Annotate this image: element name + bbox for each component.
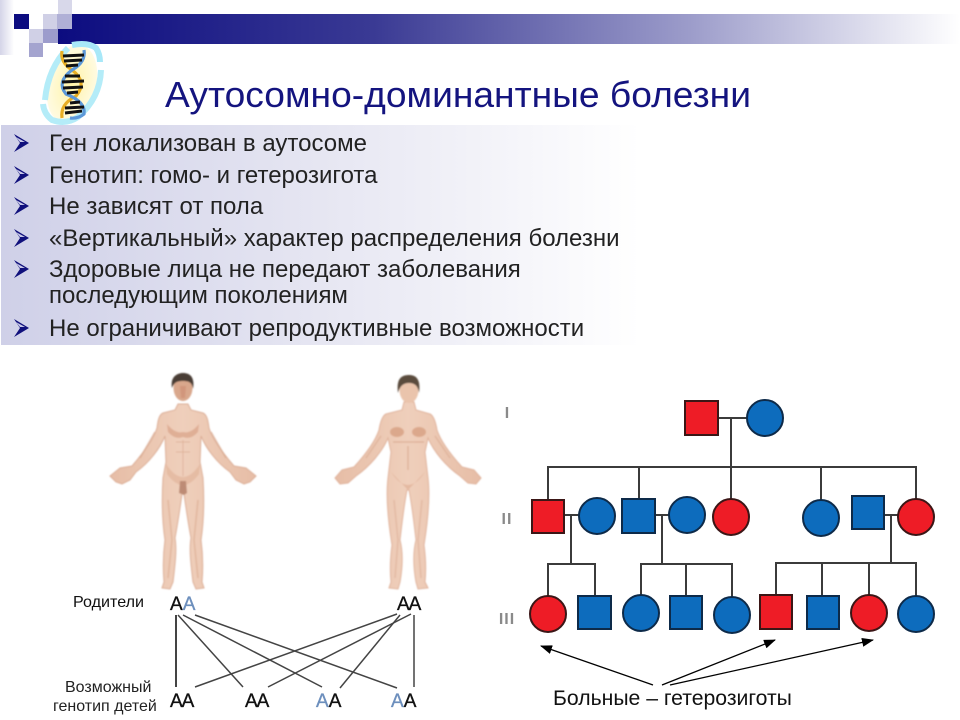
label: possible child genotype: Возможный (65, 679, 151, 696)
bullet 3: Не зависят от пола (49, 193, 264, 220)
bullet 6: Не ограничивают репродуктивные возможности (49, 315, 584, 342)
bullet 5 (14, 256, 521, 309)
generation labels (499, 405, 515, 628)
symbols (530, 400, 934, 633)
child genotype 4: AA (391, 691, 417, 712)
bullet 5: Здоровые лица не передают заболевания (49, 256, 521, 283)
bullet 2: Генотип: гомо- и гетерозигота (49, 162, 378, 189)
panel: bullet list background (1, 125, 640, 345)
title: Аутосомно-доминантные болезни (165, 74, 751, 115)
child alleles (170, 691, 417, 712)
generation labels: I (505, 405, 509, 422)
figure: female body (335, 375, 481, 589)
pedigree chart (499, 400, 934, 633)
label: parents: Родители (73, 594, 144, 611)
arrows to affected heterozygotes (541, 640, 873, 685)
icon: DNA helix (39, 39, 105, 129)
caption: affected heterozygotes: Больные – гетерозиготы (553, 687, 792, 710)
allele pair: mother: AA (397, 594, 422, 615)
bullet 4: «Вертикальный» характер распределения болезни (49, 225, 620, 252)
allele pair: father: AA (170, 594, 196, 615)
connecting lines (548, 418, 916, 597)
bullet 5: последующим поколениям (49, 282, 348, 309)
header decoration: gradient bar and squares (0, 0, 960, 57)
figure: male body (110, 373, 256, 589)
child genotype 2: AA (245, 691, 270, 712)
bullet list (14, 130, 620, 342)
bullet 1: Ген локализован в аутосоме (49, 130, 367, 157)
generation labels: III (499, 611, 515, 628)
label: possible child genotype: генотип детей (53, 698, 157, 715)
generation labels: II (502, 511, 512, 528)
child genotype 1: AA (170, 691, 195, 712)
inheritance lines (176, 614, 414, 688)
parent alleles (170, 594, 422, 615)
child genotype 3: AA (316, 691, 342, 712)
